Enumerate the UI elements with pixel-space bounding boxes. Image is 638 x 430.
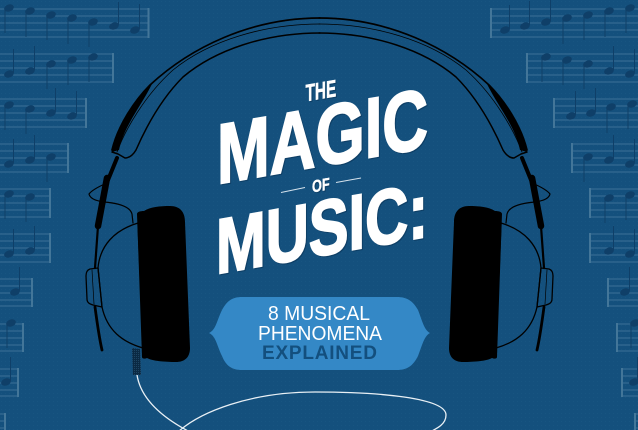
title word: MUSIC:: MUSIC: <box>216 166 428 291</box>
left ear cup <box>86 158 190 375</box>
right headband half <box>319 18 527 158</box>
title dashes around OF <box>281 178 361 192</box>
title word: MAGIC: MAGIC <box>217 70 428 202</box>
subtitle badge <box>209 297 430 370</box>
title <box>216 70 428 291</box>
right ear cup <box>449 158 553 362</box>
white audio cable <box>137 375 446 430</box>
subtitle line 2: PHENOMENA <box>258 323 383 345</box>
subtitle line 1: 8 MUSICAL <box>268 303 370 325</box>
title word: THE: THE <box>306 76 336 107</box>
title word: OF: OF <box>312 175 330 197</box>
subtitle line 3: EXPLAINED <box>262 343 377 364</box>
sheet music: left staves <box>0 2 150 430</box>
headphones <box>86 18 553 375</box>
sheet music: right staves <box>490 0 638 430</box>
left headband half <box>112 18 320 158</box>
